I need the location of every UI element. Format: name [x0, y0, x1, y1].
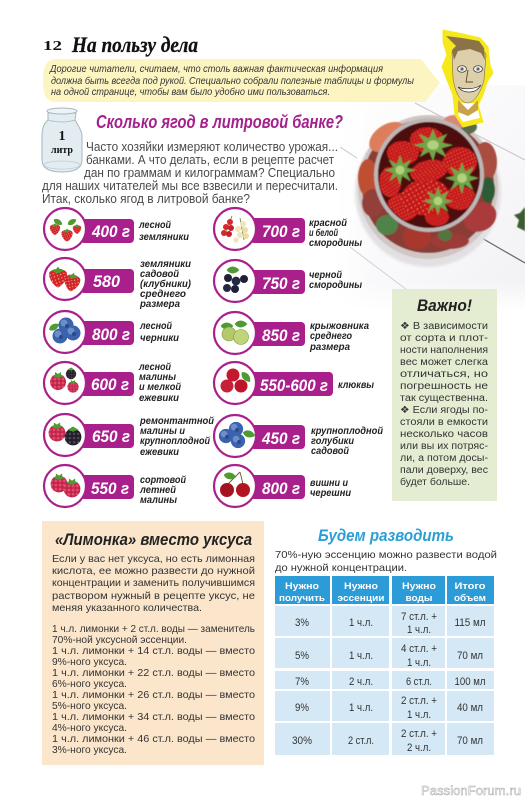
table: dilution of essence: 9%: [295, 702, 309, 714]
heading: section title: На пользу дела: [71, 32, 198, 57]
table: dilution of essence: объем: [454, 593, 486, 604]
table: dilution of essence: 4 ст.л. +: [401, 643, 437, 655]
table: dilution of essence: 1 ч.л.: [407, 624, 431, 636]
berry badge: summer raspberry 550 g: [44, 465, 186, 507]
berry badge: red and white currant 700 g: смородины: [309, 238, 362, 249]
panel: important note: отличаться, но: [400, 369, 489, 380]
panel: citric acid instead of vinegar: «Лимонка» вместо уксуса: [55, 531, 252, 549]
berry badge: red and white currant 700 g: [214, 208, 362, 250]
table: dilution of essence: 5%: [295, 650, 309, 662]
table: dilution of essence: 1 ч.л.: [407, 709, 431, 721]
berry badge: blackcurrant 750 g: 750 г: [262, 275, 300, 293]
table: dilution of essence: Итого: [454, 581, 486, 592]
panel: citric acid instead of vinegar: Если у вас нет уксуса, но есть лимонная: [52, 553, 255, 565]
panel: citric acid instead of vinegar: концентрации и заменить получившимся: [52, 577, 255, 589]
berry badge: garden strawberry 580: (клубники): [140, 278, 192, 290]
berry badge: garden strawberry 580: [44, 258, 192, 310]
berry badge: highbush blueberry 450 g: голубики: [311, 435, 354, 447]
panel: important note: пали доверху, вес: [400, 465, 488, 476]
berry badge: remontant raspberry 650 g: 650 г: [92, 428, 130, 446]
panel: important note: вес может слегка: [400, 357, 488, 368]
speech bubble intro: Дорогие читатели, считаем, что столь важная фактическая информация: [49, 63, 383, 75]
table: dilution of essence: эссенции: [338, 593, 385, 604]
table: dilution of essence: 1 ч.л.: [349, 617, 373, 629]
berry badge: blackcurrant 750 g: черной: [309, 270, 342, 281]
berry badge: cranberry 550-600 g: клюквы: [338, 380, 374, 391]
table: dilution of essence: 70 мл: [457, 650, 483, 662]
speech bubble intro: на одной странице, чтобы вам было удобно ими пользоваться.: [51, 86, 330, 98]
panel: important note: будет больше.: [400, 476, 470, 488]
berry badge: wild strawberry 400 g: [44, 208, 189, 250]
intro text: [42, 139, 338, 206]
table: dilution of essence: 1 ч.л.: [349, 650, 373, 662]
panel: citric acid instead of vinegar: 1 ч.л. лимонки + 14 ст.л. воды — вместо: [52, 645, 255, 657]
berry badge: garden strawberry 580: земляники: [140, 259, 191, 270]
panel: important note: стояли в емкости: [400, 417, 488, 428]
panel: important note: от сорта и плот-: [400, 333, 488, 344]
panel: important note: так существенна.: [400, 393, 488, 404]
berry badge: summer raspberry 550 g: малины: [140, 495, 177, 506]
panel: citric acid instead of vinegar: кислота, ее можно развести до нужной: [52, 565, 255, 577]
berry badge: summer raspberry 550 g: летней: [139, 485, 176, 496]
speech bubble intro: должна быть всегда под рукой. Специально собрали полезные таблицы и формулы: [51, 75, 414, 87]
berry badge: summer raspberry 550 g: сортовой: [140, 475, 186, 486]
page number: 12: [43, 39, 62, 54]
photo: jar of strawberries on white boards: [340, 102, 525, 294]
berry badge: blackcurrant 750 g: [214, 260, 362, 302]
icon: one litre jar: 1: [58, 129, 66, 144]
table: dilution of essence: 2 ч.л.: [407, 742, 431, 754]
text: dilution intro: до нужной концентрации.: [275, 562, 407, 574]
berry badge: gooseberry 850 g: среднего: [310, 331, 352, 342]
panel: citric acid instead of vinegar: 3%-ного уксуса.: [52, 744, 127, 756]
panel: citric acid instead of vinegar: [42, 521, 264, 765]
berry badge: highbush blueberry 450 g: [214, 415, 383, 457]
berry badge: gooseberry 850 g: размера: [309, 342, 350, 353]
panel: important note: ли, а потом досы-: [400, 453, 488, 464]
panel: citric acid instead of vinegar: 1 ч.л. лимонки + 2 ст.л. воды — заменитель: [52, 623, 255, 635]
speech bubble intro: [43, 59, 440, 102]
table: dilution of essence: 6 ст.л.: [406, 676, 432, 688]
icon: one litre jar: литр: [51, 145, 73, 156]
panel: important note: или вы их потряс-: [400, 441, 488, 452]
berry badge: garden strawberry 580: 580: [93, 273, 121, 291]
panel: citric acid instead of vinegar: 1 ч.л. лимонки + 46 ст.л. воды — вместо: [52, 733, 255, 745]
berry badge: cherries 800 g: 800 г: [262, 480, 300, 498]
berry badge: wild raspberry 600 g: и мелкой: [139, 382, 181, 393]
berry badge: cherries 800 g: [214, 465, 351, 507]
heading: how many berries in a litre jar: Сколько ягод в литровой банке?: [96, 111, 343, 132]
table: dilution of essence: [275, 576, 494, 755]
berry badge: wild strawberry 400 g: земляники: [139, 232, 189, 243]
table: dilution of essence: 7%: [295, 676, 309, 688]
panel: important note: ности наполнения: [400, 345, 488, 356]
berry badge: summer raspberry 550 g: 550 г: [91, 480, 129, 498]
berry badge: highbush blueberry 450 g: 450 г: [261, 430, 300, 448]
berry badge: highbush blueberry 450 g: садовой: [311, 446, 349, 457]
table: dilution of essence: 3%: [295, 617, 309, 629]
table: dilution of essence: 1 ч.л.: [407, 657, 431, 669]
panel: important note: ❖ Если ягоды по-: [400, 405, 488, 416]
berry badge: wild bilberry 800 g: 800 г: [92, 326, 130, 344]
panel: important note: погрешность не: [400, 381, 489, 392]
panel: citric acid instead of vinegar: 9%-ного уксуса.: [52, 656, 127, 668]
panel: citric acid instead of vinegar: раствором нужный в рецепте уксус, не: [52, 590, 255, 602]
table: dilution of essence: 2 ст.л. +: [401, 728, 437, 740]
icon: caricature face mascot: [442, 30, 493, 127]
berry badge: wild raspberry 600 g: лесной: [138, 362, 171, 373]
berry badge: blackcurrant 750 g: смородины: [309, 280, 362, 291]
berry badge: wild bilberry 800 g: лесной: [139, 321, 172, 332]
berry badge: garden strawberry 580: среднего: [140, 289, 186, 300]
table: dilution of essence: Нужно: [402, 581, 436, 592]
intro text: дан по граммам и килограммам? Специально: [84, 165, 335, 180]
berry badge: wild bilberry 800 g: [44, 311, 179, 353]
berry badge: garden strawberry 580: садовой: [140, 269, 179, 280]
intro text: банками. А что делать, если в рецепте расчет: [86, 152, 334, 167]
berry badge: wild strawberry 400 g: лесной: [138, 220, 171, 231]
intro text: Часто хозяйки измеряют количество урожая...: [86, 139, 338, 154]
table: dilution of essence: 30%: [292, 735, 312, 747]
berry badge: wild bilberry 800 g: черники: [140, 333, 179, 344]
table: dilution of essence: 40 мл: [457, 702, 483, 714]
berry badge: remontant raspberry 650 g: [44, 414, 214, 458]
berry badge: gooseberry 850 g: [214, 312, 369, 354]
table: dilution of essence: 115 мл: [454, 617, 486, 629]
panel: citric acid instead of vinegar: 6%-ного уксуса.: [52, 678, 127, 690]
table: dilution of essence: воды: [406, 593, 432, 604]
table: dilution of essence: получить: [279, 593, 325, 604]
berry badge: red and white currant 700 g: 700 г: [262, 223, 300, 241]
berry badge: red and white currant 700 g: красной: [309, 218, 347, 229]
table: dilution of essence: 70 мл: [457, 735, 483, 747]
berry badge: remontant raspberry 650 g: малины и: [140, 426, 185, 437]
table: dilution of essence: 7 ст.л. +: [401, 611, 437, 623]
intro text: Итак, сколько ягод в литровой банке?: [42, 191, 250, 206]
table: dilution of essence: 100 мл: [454, 676, 486, 688]
berry badge: remontant raspberry 650 g: ежевики: [140, 447, 179, 458]
panel: citric acid instead of vinegar: 5%-ного уксуса.: [52, 700, 127, 712]
icon: one litre jar: [42, 108, 82, 172]
table: dilution of essence: 2 ст.л.: [348, 735, 374, 747]
berry badge: cranberry 550-600 g: [214, 362, 374, 404]
panel: citric acid instead of vinegar: 1 ч.л. лимонки + 26 ст.л. воды — вместо: [52, 689, 255, 701]
table: dilution of essence: 1 ч.л.: [349, 702, 373, 714]
berry badge: garden strawberry 580: размера: [139, 299, 180, 310]
panel: citric acid instead of vinegar: 1 ч.л. лимонки + 34 ст.л. воды — вместо: [52, 711, 255, 723]
berry badge: red and white currant 700 g: и белой: [309, 227, 338, 239]
panel: citric acid instead of vinegar: меняя указанного количества.: [52, 602, 202, 614]
table: dilution of essence: Нужно: [285, 581, 319, 592]
table: dilution of essence: Нужно: [344, 581, 378, 592]
berry badge: gooseberry 850 g: 850 г: [262, 327, 300, 345]
berry badge: wild strawberry 400 g: 400 г: [91, 223, 130, 241]
berry badge: cranberry 550-600 g: 550-600 г: [260, 377, 328, 395]
intro text: для наших читателей мы все взвесили и пересчитали.: [42, 178, 338, 193]
panel: important note: Важно!: [417, 296, 472, 315]
berry badge: cherries 800 g: вишни и: [310, 478, 348, 489]
panel: important note: ❖ В зависимости: [400, 321, 488, 332]
panel: citric acid instead of vinegar: 4%-ного уксуса.: [52, 722, 127, 734]
panel: citric acid instead of vinegar: 70%-ной уксусной эссенции.: [52, 634, 187, 646]
berry badge: remontant raspberry 650 g: крупноплодной: [140, 436, 210, 447]
berry badge: wild raspberry 600 g: [44, 362, 181, 404]
panel: important note: несколько часов: [400, 429, 488, 440]
berry badge: wild raspberry 600 g: ежевики: [139, 393, 179, 404]
berry badge: wild raspberry 600 g: 600 г: [91, 376, 129, 394]
watermark: PassionForum.ru: [421, 783, 521, 798]
text: dilution intro: 70%-ную эссенцию можно развести водой: [275, 549, 497, 561]
berry badge: highbush blueberry 450 g: крупноплодной: [311, 426, 383, 437]
table: dilution of essence: 2 ч.л.: [349, 676, 373, 688]
heading: dilution: Будем разводить: [318, 526, 454, 545]
panel: important note: [392, 289, 497, 501]
berry badge: remontant raspberry 650 g: ремонтантной: [139, 416, 214, 427]
table: dilution of essence: 2 ст.л. +: [401, 695, 437, 707]
berry badge: gooseberry 850 g: крыжовника: [310, 321, 369, 332]
berry badge: cherries 800 g: черешни: [310, 488, 351, 499]
text: dilution intro: [275, 549, 497, 574]
berry badge: wild raspberry 600 g: малины: [139, 372, 176, 383]
panel: citric acid instead of vinegar: 1 ч.л. лимонки + 22 ст.л. воды — вместо: [52, 667, 255, 679]
